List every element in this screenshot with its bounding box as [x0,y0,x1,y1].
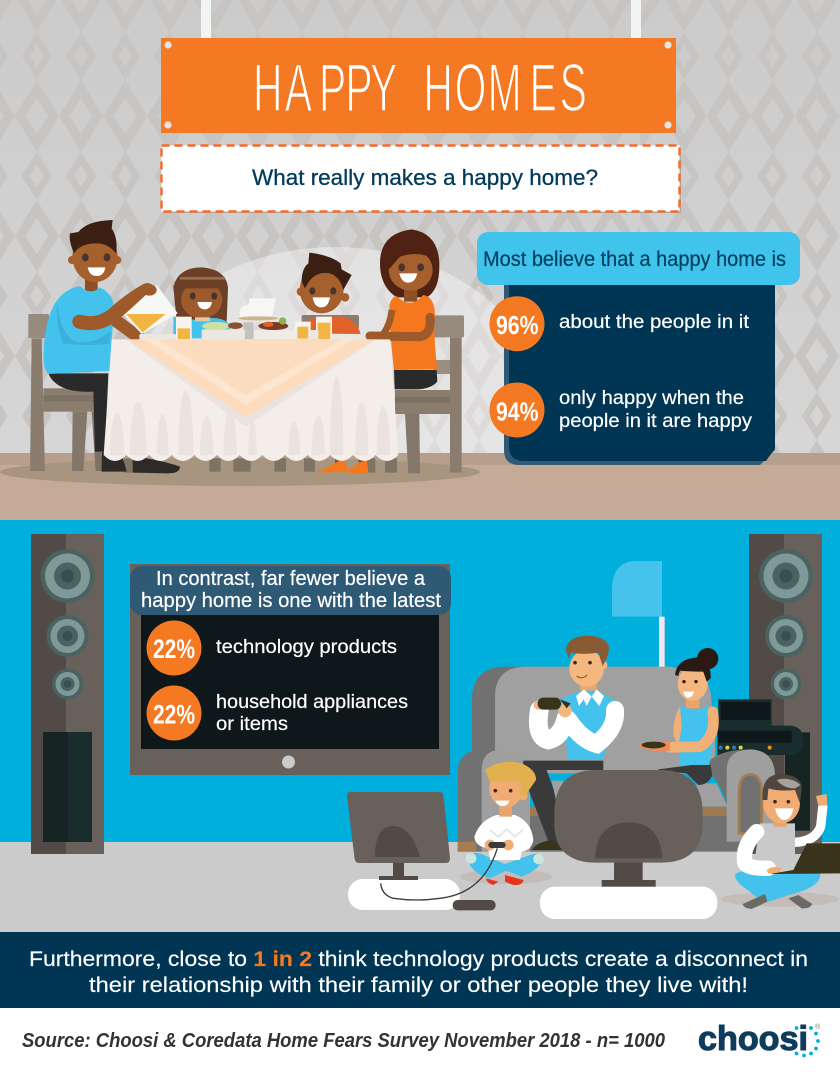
logo: choosi: ® [815,1023,821,1031]
stat technology products: 22% [153,634,195,664]
television panel: latest technology [130,564,451,775]
tv button [282,756,295,768]
stat 96%: 96% [496,310,538,340]
title sign [161,38,676,133]
banner: key takeaway [0,932,840,1008]
source footer [0,1008,840,1072]
juice pitcher [124,284,178,334]
stat 96% [490,296,750,351]
stat household appliances: or items [216,713,288,735]
man on sofa [523,636,615,850]
table cloth [104,339,398,461]
illustration: small monitor on white pad [347,792,460,910]
question box [162,146,681,213]
stat 94%: only happy when the [559,387,744,409]
background: wallpaper upper room [0,0,840,589]
girl [173,267,230,338]
heading label: In contrast, far fewer believe a [156,568,426,590]
stat technology products [146,620,397,676]
stat 94%: 94% [496,396,538,426]
tv frame [130,564,450,775]
man with laptop [721,774,840,909]
speaker: left [31,534,104,854]
hanging straps [201,0,641,38]
right chair [395,315,464,473]
floor lamp [612,561,665,670]
boy [297,253,361,334]
dad [43,220,147,452]
dark panel [504,284,775,465]
illustration: family at dining table [28,220,464,473]
game console and cable [381,848,497,910]
question text: What really makes a happy home? [252,165,598,190]
background: blue wall lower room [0,520,840,842]
floor: dining room [0,453,840,520]
shoes [102,452,369,473]
background: grey floor [0,842,840,932]
banner: key takeaway: their relationship with their family or other people they live with! [89,973,748,997]
stat 96%: about the people in it [559,311,750,333]
blond boy with game controller [459,762,553,885]
stat technology products: technology products [216,636,397,658]
logo: choosi: choosi [698,1020,808,1058]
heading label [130,566,451,615]
tv screen [141,610,439,749]
heading label: happy home is one with the latest [141,590,441,612]
source footer: Source: Choosi & Coredata Home Fears Survey November 2018 - n= 1000 [22,1030,665,1052]
large monitor back [540,770,717,919]
speaker: right [749,534,822,854]
stat household appliances [146,686,408,740]
sofa [458,667,775,852]
left chair [28,314,102,471]
banner: key takeaway: Furthermore, close to 1 in 2 think technology products create a disconnect in [29,947,808,971]
title: HAPPY HOMES [253,49,587,126]
panel: happy home results [477,232,800,465]
stereo [717,699,810,831]
stat household appliances: 22% [153,700,195,730]
mom [370,229,439,389]
table legs [124,458,397,473]
stat 94% [490,382,752,438]
illustration: family on sofa with devices [381,561,840,919]
food and drinks [139,298,363,339]
heading label [477,232,800,285]
stat 94%: people in it are happy [559,410,752,432]
woman on sofa [638,648,718,785]
heading label: Most believe that a happy home is [483,248,786,271]
stat household appliances: household appliances [216,691,408,713]
